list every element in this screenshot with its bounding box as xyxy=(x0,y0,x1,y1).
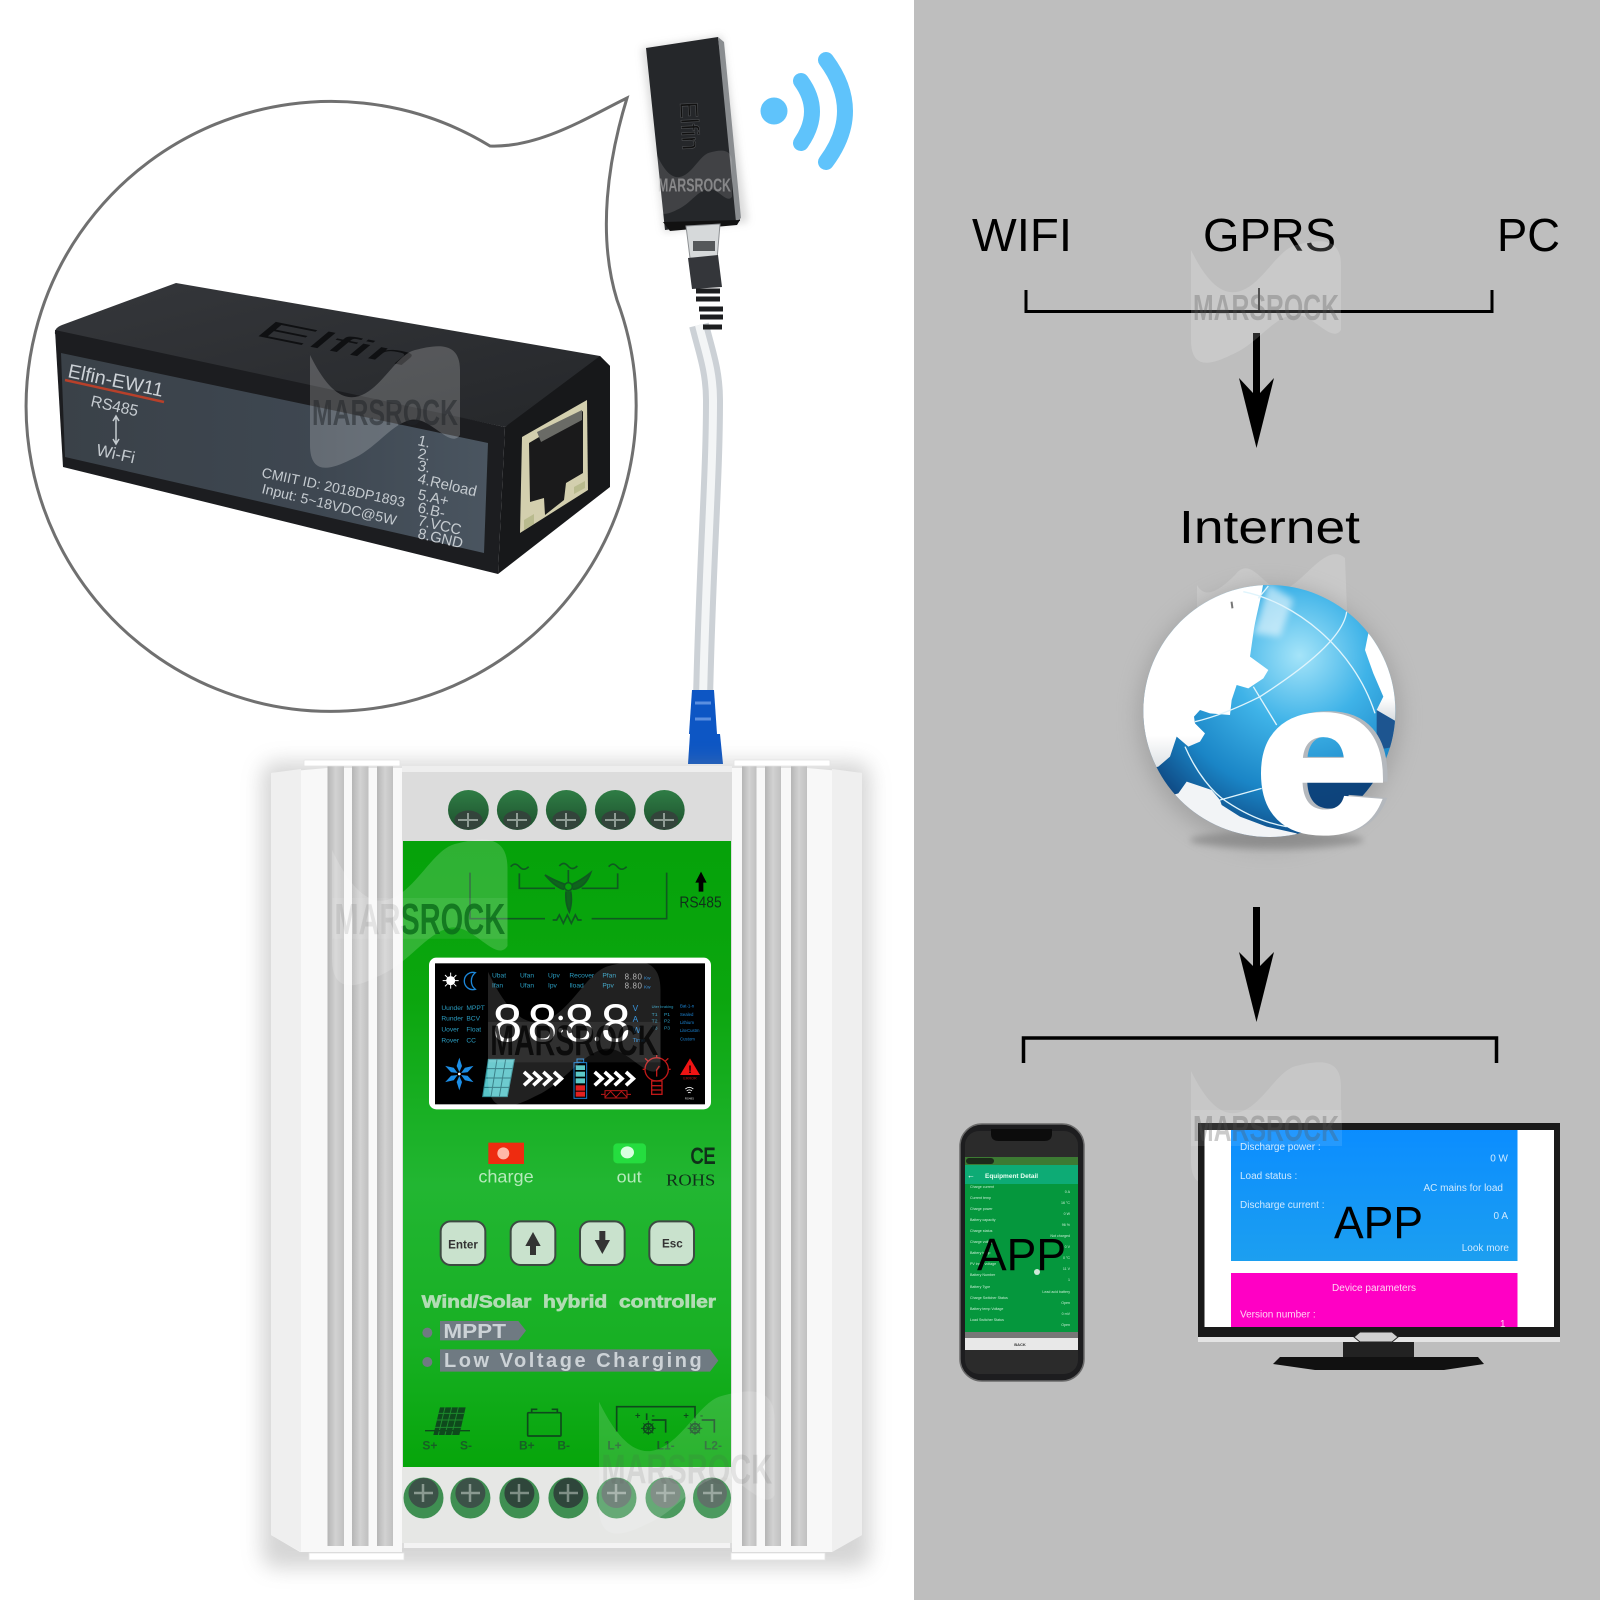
top status labels: Iload xyxy=(569,983,584,990)
app row labels: Battery temp Voltage xyxy=(970,1307,1003,1311)
icon: load terminals xyxy=(617,1407,714,1435)
seven-segment readout: 8 xyxy=(492,995,522,1054)
left mode labels: CC xyxy=(466,1037,476,1044)
load polarity marks: - xyxy=(700,1410,703,1420)
back label: BACK xyxy=(1014,1342,1026,1347)
monitor screen xyxy=(1204,1130,1554,1327)
green out LED xyxy=(613,1143,646,1163)
pin list: 2. xyxy=(416,445,432,465)
icon: solar terminal xyxy=(425,1407,470,1435)
watermark: controller lower right: MARSROCK xyxy=(601,1446,773,1493)
monitor bezel xyxy=(1198,1123,1560,1337)
globe halo shadow xyxy=(1138,585,1401,848)
left ribs xyxy=(328,766,344,1546)
blue boot xyxy=(689,690,717,734)
terminal labels: L+ xyxy=(607,1438,622,1452)
seven-segment readout: 8 xyxy=(564,995,594,1054)
watermark: LCD centre: MARSROCK xyxy=(490,1017,659,1064)
connector: upper bracket xyxy=(1026,288,1492,312)
pin list: 7.VCC xyxy=(416,512,463,539)
wifi dot xyxy=(760,98,788,124)
device: Elfin-EW11 enlarged module xyxy=(55,283,610,574)
port opening xyxy=(529,411,583,515)
plate lower section xyxy=(402,1467,732,1543)
unit labels: Time xyxy=(633,1038,645,1044)
e logo: e xyxy=(1255,637,1387,876)
left mode labels: Runder xyxy=(441,1016,464,1023)
arrow: to devices xyxy=(1239,907,1274,1022)
icon: LCD battery xyxy=(574,1059,587,1098)
pin list xyxy=(416,432,478,552)
app row values: Lead acid battery xyxy=(1042,1290,1070,1294)
lower panel graphics xyxy=(422,1143,722,1452)
device: Elfin dongle upright xyxy=(642,36,748,327)
wifi inner arc xyxy=(801,81,812,143)
right tab bottom xyxy=(731,1553,825,1560)
icon: solar panel xyxy=(483,1059,514,1097)
icon: resistor load xyxy=(601,1091,631,1098)
watermark: bracket: MARSROCK xyxy=(1193,287,1339,328)
app row values: Open xyxy=(1061,1323,1070,1327)
watermark: above television xyxy=(1191,1062,1341,1184)
app row values: 11 V xyxy=(1063,1267,1071,1271)
battery type labels: LiteCustm xyxy=(680,1028,700,1033)
watermark: dongle: MARSROCK xyxy=(658,174,731,196)
app row values: 1 xyxy=(1068,1278,1070,1282)
pin list: 8.GND xyxy=(416,525,465,552)
left tab bottom xyxy=(309,1553,404,1560)
right wing xyxy=(732,768,862,1552)
timer labels xyxy=(652,1004,673,1031)
left mode labels: Uover xyxy=(441,1027,460,1034)
icon: sun xyxy=(443,973,459,989)
device: hybrid controller xyxy=(262,760,870,1568)
dongle body xyxy=(646,37,740,230)
wifi outer arc xyxy=(826,60,845,162)
watermark: text on green panel: MARSROCK xyxy=(334,896,505,944)
left mode labels: Float xyxy=(466,1027,481,1034)
icon: Internet globe xyxy=(1134,579,1405,854)
app row labels: Charge status xyxy=(970,1229,993,1233)
top face xyxy=(55,283,610,427)
small island mark xyxy=(1231,602,1233,608)
icon: battery terminal xyxy=(528,1409,561,1436)
tildes xyxy=(511,863,627,869)
right heat sink xyxy=(731,760,862,1560)
top status labels: Ubat xyxy=(492,973,506,980)
app row labels: Charge Switcher Status xyxy=(970,1296,1008,1300)
left mode labels: MPPT xyxy=(466,1005,485,1012)
app row labels: Charge power xyxy=(970,1207,993,1211)
watermark: controller lower right xyxy=(599,1391,774,1534)
timer labels: T1 xyxy=(652,1012,658,1018)
unit labels: V xyxy=(633,1003,639,1013)
battery type labels: Sealed xyxy=(680,1012,694,1017)
connector: lower bracket xyxy=(1024,1038,1496,1063)
pink card xyxy=(1231,1273,1518,1327)
top terminal holes xyxy=(448,790,685,830)
highlight xyxy=(1253,583,1293,637)
ROHS mark: ROHS xyxy=(666,1171,715,1190)
cable highlight xyxy=(699,325,713,700)
app row values: 0 mV xyxy=(1062,1312,1071,1316)
LCD screen xyxy=(429,958,711,1109)
green front panel xyxy=(403,841,731,1467)
strain relief xyxy=(696,291,723,327)
dongle logo: Elfin xyxy=(674,101,705,151)
kilowatt units: Kw xyxy=(644,975,651,980)
blue card text xyxy=(1240,1142,1509,1254)
dark sea right xyxy=(1377,710,1397,750)
callout: speech bubble magnifier xyxy=(26,98,636,711)
icon: small wifi xyxy=(685,1087,693,1093)
battery type labels: Custom xyxy=(680,1037,695,1042)
Esc button xyxy=(649,1221,694,1265)
cable jacket xyxy=(699,325,713,700)
right ribs xyxy=(742,766,756,1546)
cable: white network cable xyxy=(699,325,713,700)
LCD bezel xyxy=(429,958,711,1109)
dongle shadow xyxy=(642,36,748,232)
continent bottom xyxy=(1174,782,1297,837)
pink card text: 1 xyxy=(1500,1319,1506,1330)
terminal labels: S+ xyxy=(422,1438,437,1452)
dongle side highlight xyxy=(718,37,741,222)
blue card text: Look more xyxy=(1462,1243,1509,1254)
left wing xyxy=(271,768,402,1552)
clear plug xyxy=(686,224,720,260)
upper panel graphics xyxy=(429,863,722,1109)
load polarity marks xyxy=(635,1410,703,1420)
out label: out xyxy=(617,1168,642,1187)
text: Internet: Internet xyxy=(1179,501,1360,553)
port tab xyxy=(537,410,582,442)
RJ45 port xyxy=(520,400,588,533)
RS485 mini label: RS485 xyxy=(685,1096,694,1100)
top status labels: Ipv xyxy=(548,983,558,990)
RS485 label: RS485 xyxy=(679,894,722,911)
app dot xyxy=(1034,1269,1040,1275)
terminal labels: S- xyxy=(460,1438,472,1452)
turbine hub xyxy=(564,883,572,891)
seven-segment readout: 8 xyxy=(527,995,557,1054)
back arrow: ← xyxy=(967,1171,975,1180)
icon: moon xyxy=(464,972,475,990)
blue boot notches xyxy=(695,703,711,719)
terminal labels: B+ xyxy=(519,1438,535,1452)
watermark: controller upper left xyxy=(332,839,508,985)
connector: blue RJ45 plug xyxy=(688,690,723,764)
blue card text: Discharge current : xyxy=(1240,1200,1324,1211)
icon: warning triangle xyxy=(680,1058,700,1075)
battery type labels xyxy=(680,1003,700,1042)
blue card text: 0 A xyxy=(1494,1211,1508,1222)
app row labels: Current temp xyxy=(970,1196,991,1200)
down button xyxy=(580,1221,625,1265)
watermark: LCD centre xyxy=(488,961,660,1106)
globe continents xyxy=(1143,585,1396,837)
phone notch xyxy=(991,1129,1052,1141)
watermark: television xyxy=(1191,1108,1342,1149)
CMIIT text: CMIIT ID: 2018DP1893 xyxy=(260,464,407,510)
pin list: 1. xyxy=(416,432,432,452)
app row labels: Charge voltage xyxy=(970,1240,994,1244)
phone body xyxy=(960,1124,1084,1381)
device: television app xyxy=(1198,1123,1560,1370)
globe ocean xyxy=(1143,585,1395,837)
up button xyxy=(511,1221,555,1265)
pink card text: Version number : xyxy=(1240,1310,1316,1320)
app row labels xyxy=(970,1185,1008,1322)
red underline xyxy=(65,380,164,402)
left tab top xyxy=(304,760,400,766)
e logo depth: e xyxy=(1260,636,1392,875)
app row labels: PV input voltage xyxy=(970,1262,996,1266)
blue body xyxy=(688,734,723,764)
timer labels: Uter braking xyxy=(652,1004,673,1009)
LCD background xyxy=(435,963,705,1104)
monitor stand base xyxy=(1273,1357,1484,1370)
top status labels: Recover xyxy=(569,973,595,980)
watermark on module xyxy=(310,346,460,468)
app row values: 0 V xyxy=(1065,1245,1071,1249)
app row values: 96 % xyxy=(1062,1223,1071,1227)
plug boot xyxy=(688,255,722,289)
battery type labels: Bat-1-n xyxy=(680,1003,695,1008)
back bar xyxy=(965,1338,1078,1350)
icon: lamp xyxy=(643,1055,671,1094)
red charge LED xyxy=(488,1143,524,1164)
watermark: dongle xyxy=(657,151,732,214)
pin list: 6.B- xyxy=(416,499,447,522)
app row labels: Battery temp xyxy=(970,1251,990,1255)
input text: Input: 5~18VDC@5W xyxy=(260,480,399,528)
model name: Elfin-EW11 xyxy=(66,360,165,402)
app row values: 16 °C xyxy=(1061,1201,1070,1205)
blue card xyxy=(1231,1130,1518,1261)
left wing edge xyxy=(271,769,301,1552)
unit labels: W xyxy=(633,1025,641,1035)
watermark: controller upper left: MARSROCK xyxy=(334,896,505,944)
top status labels: Ppv xyxy=(602,983,614,990)
text: PC: PC xyxy=(1497,209,1560,261)
monitor stand neck xyxy=(1343,1342,1414,1357)
right tab top xyxy=(734,760,830,766)
app row values: 0 A xyxy=(1065,1190,1071,1194)
watermark: television: MARSROCK xyxy=(1193,1108,1339,1149)
top status labels: Ifan xyxy=(492,983,503,990)
app header xyxy=(965,1165,1078,1184)
terminal labels: B- xyxy=(557,1438,570,1452)
wind turbine wiring schematic xyxy=(470,863,667,923)
Low Voltage Charging tag: Low Voltage Charging xyxy=(444,1350,702,1372)
continent left xyxy=(1143,585,1268,768)
app body xyxy=(965,1184,1078,1332)
panel: white background xyxy=(0,0,914,1600)
left mode labels xyxy=(441,1005,485,1044)
continent right xyxy=(1365,633,1396,721)
left mode labels: Rover xyxy=(441,1037,460,1044)
seven-segment readout xyxy=(492,995,631,1054)
readout colon and point xyxy=(558,1016,599,1041)
left heat sink xyxy=(271,760,404,1560)
pin list: 4.Reload xyxy=(416,470,478,500)
seven-segment readout: 8 xyxy=(601,995,631,1054)
top status labels: Ufan xyxy=(520,973,534,980)
power readouts xyxy=(625,972,643,991)
grey gap xyxy=(965,1332,1078,1338)
left mode labels: Uunder xyxy=(441,1005,464,1012)
app row values: Open xyxy=(1061,1301,1070,1305)
header title: Equipment Detail xyxy=(985,1173,1038,1180)
text: WIFI: WIFI xyxy=(972,209,1072,261)
blue card text: AC mains for load xyxy=(1424,1183,1503,1194)
timer labels: P3 xyxy=(664,1025,670,1031)
front face xyxy=(55,330,505,574)
top status labels: Upv xyxy=(548,973,561,980)
centre plate xyxy=(402,766,732,1548)
timer labels: P2 xyxy=(664,1019,670,1025)
globe grid lines xyxy=(1185,586,1375,827)
app row labels: Load Switcher Status xyxy=(970,1318,1004,1322)
top status labels: Pfan xyxy=(602,973,616,980)
blue card text: Load status : xyxy=(1240,1171,1297,1182)
load polarity marks: - xyxy=(652,1410,655,1420)
Wi-Fi label: Wi-Fi xyxy=(95,441,137,467)
plug contacts xyxy=(693,241,715,251)
label panel xyxy=(61,353,488,553)
monitor chin strip xyxy=(1198,1337,1560,1342)
embossed logo: Elfin xyxy=(246,316,429,371)
chevrons right xyxy=(595,1072,633,1085)
bottom terminal screws xyxy=(404,1478,731,1518)
outer wire xyxy=(470,873,667,919)
device: smartphone app xyxy=(960,1124,1084,1381)
timer labels: T2 xyxy=(652,1019,658,1025)
terminal labels: L1- xyxy=(657,1438,675,1452)
right face xyxy=(498,356,610,574)
terminal labels: L2- xyxy=(704,1438,722,1452)
CE mark: CE xyxy=(691,1143,715,1168)
APP label monitor: APP xyxy=(1334,1197,1423,1248)
terminal labels xyxy=(422,1438,722,1452)
watermark on module: MARSROCK xyxy=(312,392,458,433)
charge label: charge xyxy=(478,1167,534,1187)
load polarity marks: + xyxy=(635,1410,641,1420)
right wing edge xyxy=(832,769,862,1552)
load polarity marks: + xyxy=(683,1410,689,1420)
status bar xyxy=(965,1157,1078,1165)
left mode labels: BCV xyxy=(466,1016,481,1023)
status bar pill xyxy=(966,1158,994,1164)
phone screen dark xyxy=(965,1131,1078,1374)
panel: grey connectivity background xyxy=(914,0,1600,1600)
timer labels: T3 xyxy=(652,1025,658,1031)
blue card text: Discharge power : xyxy=(1240,1142,1321,1153)
battery type labels: Lithium xyxy=(680,1020,694,1025)
app row values xyxy=(1042,1190,1071,1327)
timer labels: P1 xyxy=(664,1012,670,1018)
app row labels: Charge current xyxy=(970,1185,994,1189)
RS485 arrow xyxy=(695,872,707,892)
dark sea lower right xyxy=(1307,782,1373,808)
Enter button xyxy=(441,1221,485,1265)
icon: wifi signal xyxy=(760,60,845,162)
plate top edge xyxy=(402,766,732,772)
plate bottom edge xyxy=(404,1543,730,1548)
controller shadow xyxy=(262,762,870,1568)
pink card text xyxy=(1240,1283,1506,1330)
monitor logo badge xyxy=(1354,1332,1398,1342)
double arrow xyxy=(113,416,119,444)
watermark: above globe xyxy=(1197,554,1347,610)
RS485 label: RS485 xyxy=(89,393,140,420)
app row values: Not charged xyxy=(1050,1234,1070,1238)
globe ground shadow xyxy=(1190,831,1363,849)
arrow: to Internet xyxy=(1239,333,1274,448)
MPPT tag: MPPT xyxy=(443,1320,506,1343)
chevrons left xyxy=(524,1072,561,1085)
power readouts: 8.80 xyxy=(625,982,643,991)
app row values: 0 °C xyxy=(1063,1256,1070,1260)
unit labels xyxy=(633,1003,645,1044)
turbine blades xyxy=(545,873,591,912)
app row labels: Battery Number xyxy=(970,1273,996,1277)
inner wire xyxy=(519,873,618,888)
port indicator left xyxy=(524,514,534,530)
product name: Wind/Solar hybrid controller xyxy=(422,1292,716,1312)
kilowatt units xyxy=(644,975,651,990)
icon: fan star xyxy=(444,1058,475,1090)
turbine mast xyxy=(566,870,571,882)
resistor symbol xyxy=(553,915,582,923)
pink card text: Device parameters xyxy=(1332,1283,1416,1294)
pin list: 3. xyxy=(416,457,432,477)
blue card text: 0 W xyxy=(1490,1154,1509,1164)
error label: ERROR xyxy=(683,1076,697,1080)
top status labels: Ufan xyxy=(520,983,534,990)
kilowatt units: Kw xyxy=(644,985,651,990)
MPPT tag xyxy=(422,1320,526,1343)
watermark: bracket xyxy=(1191,241,1341,363)
warning mark: ! xyxy=(688,1064,692,1076)
app row values: 0 W xyxy=(1064,1212,1071,1216)
APP label phone: APP xyxy=(977,1229,1066,1280)
app row labels: Battery capacity xyxy=(970,1218,996,1222)
app row labels: Battery Type xyxy=(970,1285,990,1289)
text: GPRS: GPRS xyxy=(1203,209,1336,261)
top status labels xyxy=(492,973,616,990)
dongle bottom xyxy=(663,220,740,231)
Enter button: Enter xyxy=(448,1238,478,1251)
Esc button: Esc xyxy=(662,1238,683,1251)
power readouts: 8.80 xyxy=(625,972,643,981)
pin list: 5.A+ xyxy=(416,486,451,510)
unit labels: A xyxy=(633,1014,639,1024)
port indicator right xyxy=(574,481,585,494)
